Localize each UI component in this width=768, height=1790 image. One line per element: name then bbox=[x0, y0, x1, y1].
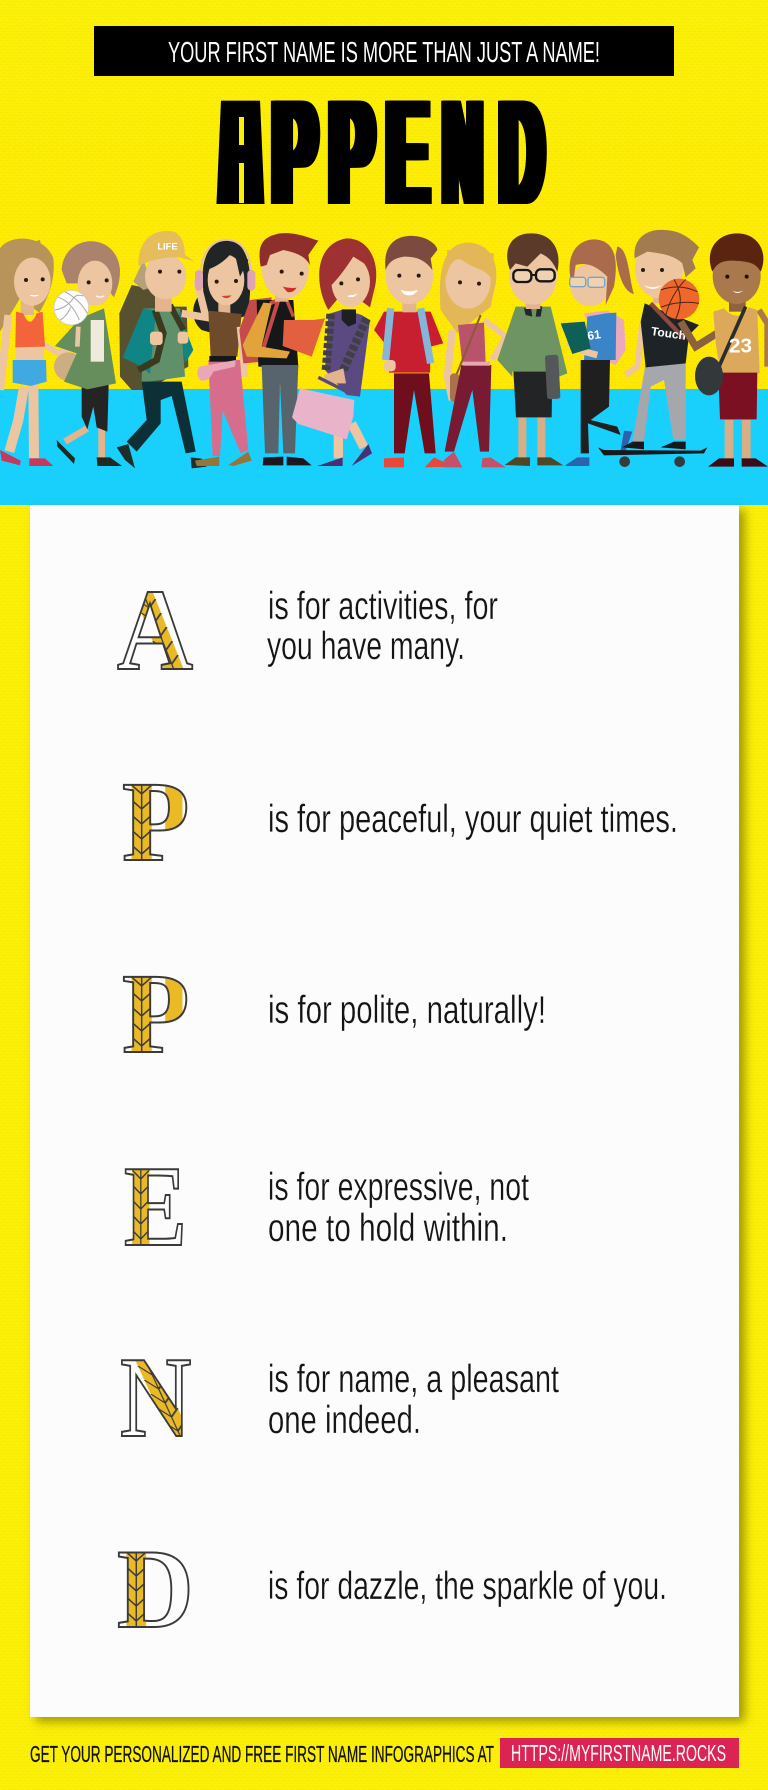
person: girl with pink bag bbox=[292, 238, 376, 466]
person: blonde girl bbox=[440, 243, 506, 467]
text: A line bbox=[267, 585, 498, 668]
panel: white letters panel bbox=[30, 505, 739, 1717]
person: boy reading book bbox=[239, 233, 325, 465]
text: E line bbox=[268, 1166, 529, 1250]
letter row 4: E bbox=[124, 1142, 529, 1270]
people left half bbox=[0, 231, 376, 468]
icon: decorative letter P: P bbox=[122, 759, 189, 886]
person: boy in glasses and green sweater bbox=[497, 233, 567, 466]
person: girl in orange top bbox=[0, 239, 80, 466]
illustration: group of young people bbox=[0, 230, 768, 468]
icon: decorative letter N: N bbox=[120, 1334, 191, 1462]
icon: decorative letter E: E bbox=[124, 1142, 187, 1270]
person: girl with ponytail and tablet: 61 bbox=[586, 327, 602, 343]
text: N line: one indeed. bbox=[268, 1399, 421, 1442]
person: girl with pink headphones bbox=[182, 240, 255, 466]
letter row 5: N bbox=[120, 1334, 559, 1462]
icon: decorative letter D: D bbox=[117, 1526, 194, 1652]
letter row 6: D bbox=[117, 1526, 667, 1652]
text: E line: is for expressive, not bbox=[268, 1166, 529, 1209]
header bar: tagline bbox=[94, 26, 674, 76]
person: boy in red shirt bbox=[374, 236, 454, 467]
person: skater boy with basketball bbox=[598, 230, 722, 467]
icon: decorative letter A: A bbox=[117, 566, 193, 695]
text: A line: you have many. bbox=[267, 625, 465, 668]
person: backpacker in yellow cap bbox=[117, 231, 207, 468]
person: girl with ponytail and tablet bbox=[561, 239, 634, 466]
letter row 3: P bbox=[122, 951, 546, 1078]
person: backpacker in yellow cap: LIFE bbox=[157, 241, 178, 251]
title: APPEND: E bbox=[387, 68, 428, 236]
icon: volleyball bbox=[54, 290, 89, 325]
text: A line: is for activities, for bbox=[268, 585, 498, 628]
text: second P line: is for polite, naturally! bbox=[268, 989, 546, 1032]
icon: decorative letter P: P bbox=[122, 951, 189, 1078]
title: APPEND: D bbox=[500, 68, 543, 236]
person: boy in yellow tank top with bag bbox=[695, 233, 768, 467]
title: APPEND: P bbox=[273, 68, 316, 236]
title: APPEND: A bbox=[234, 68, 247, 236]
text: E line: one to hold within. bbox=[268, 1207, 508, 1250]
person: boy in yellow tank top with bag: 23 bbox=[729, 335, 752, 358]
title: APPEND: N bbox=[443, 68, 482, 236]
person: skater boy with basketball: Touch bbox=[650, 324, 687, 343]
person: girl in green jacket with volleyball bbox=[54, 241, 122, 466]
letter row 1: A bbox=[117, 566, 498, 695]
letter row 2: P bbox=[122, 759, 678, 886]
text: N line: is for name, a pleasant bbox=[268, 1358, 559, 1401]
people right half bbox=[374, 230, 768, 467]
title: APPEND bbox=[216, 68, 547, 236]
title: APPEND: P bbox=[330, 68, 373, 236]
text: N line bbox=[268, 1358, 559, 1442]
